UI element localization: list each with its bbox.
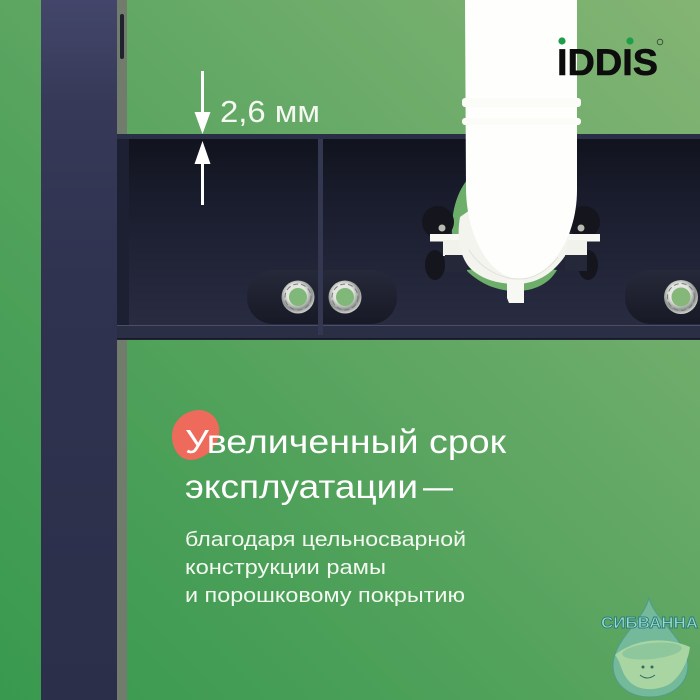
watermark: СИБВАННА: СИБВАННА [601,615,698,632]
white bracket [430,234,600,272]
frame: horizontal rail [117,134,700,340]
frame: vertical post [41,0,127,700]
watermark: СИБВАННА [601,597,698,697]
mounting plate: right with bolt [625,270,700,324]
green opening behind drain pipe [452,180,557,291]
dimension label: 2,6 мм [220,94,320,129]
heading [185,424,506,506]
logo: IDDIS: IDDIS [557,42,658,83]
arrow: up to rail edge [194,141,210,205]
description text: конструкции рамы [185,557,386,579]
bracket knobs [422,206,600,280]
description text: благодаря цельносварной [185,529,466,551]
heading: — [423,469,453,506]
description text [185,529,466,607]
description text: и порошковому покрытию [185,585,465,607]
red accent circle [172,410,219,460]
white drain pipe [459,0,581,303]
heading: Увеличенный срок [185,424,506,461]
mounting plate: left with bolts [247,270,397,324]
arrow: down to rail edge [194,71,210,134]
heading: эксплуатации [185,469,418,506]
rail divider [318,139,323,335]
